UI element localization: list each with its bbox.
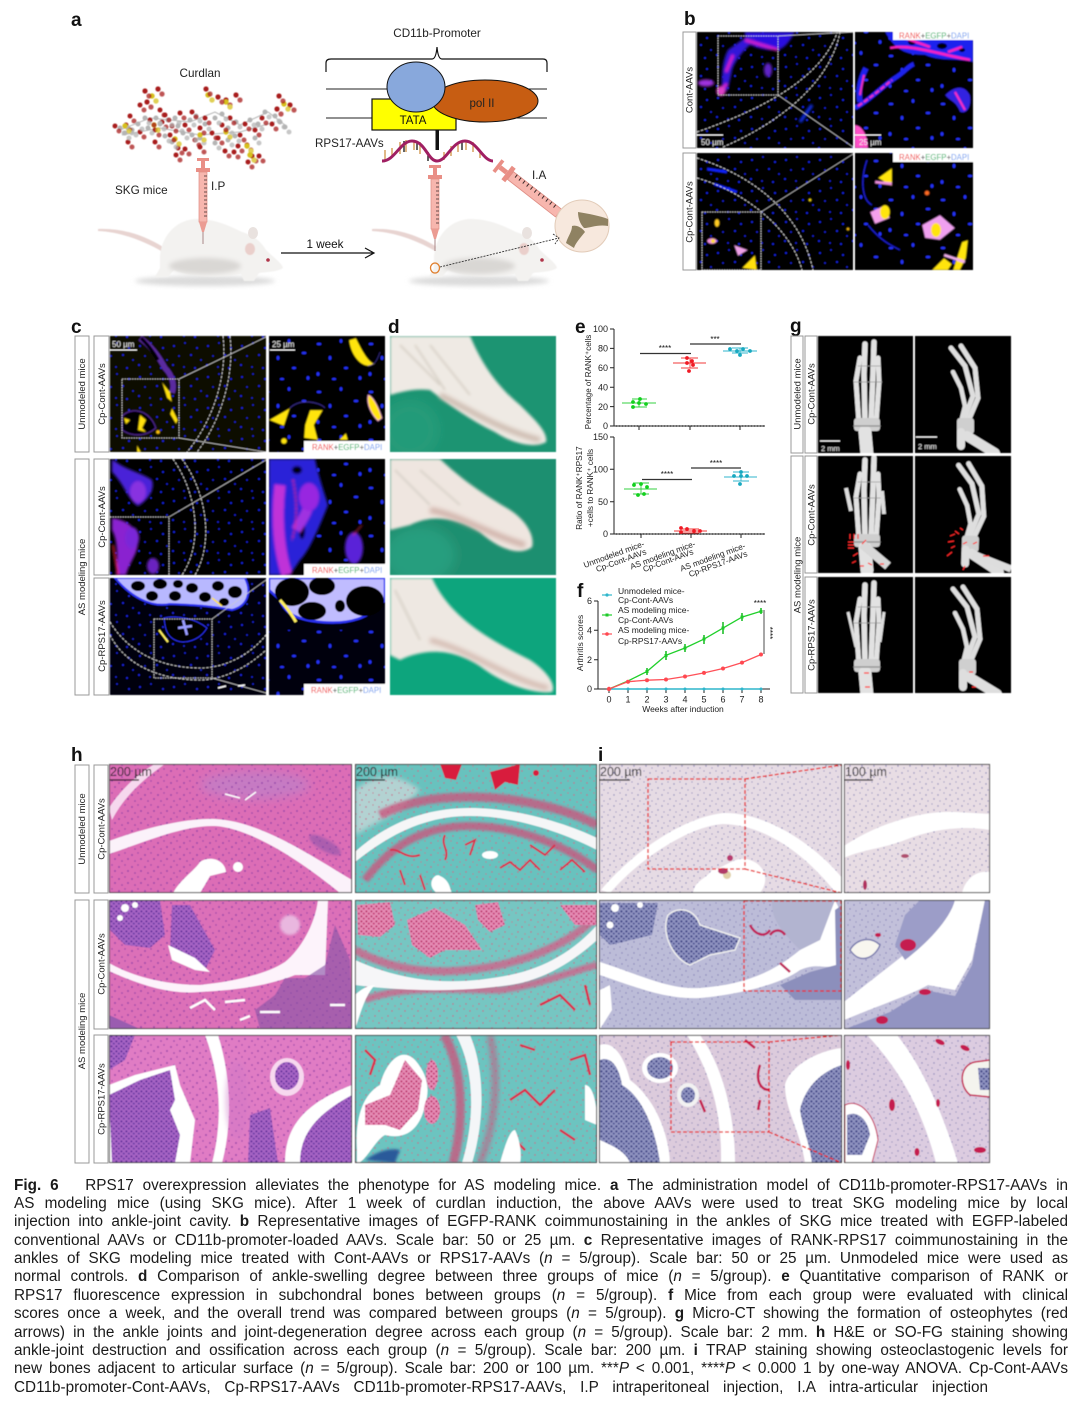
- axes: 0: [587, 684, 592, 694]
- group label unmodeled: [791, 336, 804, 453]
- axes: 2: [587, 655, 592, 665]
- mouse 2: [372, 219, 557, 286]
- row labels: Cp-Cont-AAVs: [806, 363, 818, 425]
- TRAP unmodeled zoom: [844, 764, 990, 893]
- panel label a: a: [71, 10, 82, 31]
- chart percentage of RANK+ cells: 100: [593, 324, 608, 334]
- mouse 1: [98, 219, 283, 286]
- CT row 3 front: [818, 577, 913, 695]
- panel g: micro-CT: [790, 316, 1011, 695]
- row labels: Cp-Cont-AAVs: [96, 798, 108, 860]
- arrow 1 week: 1 week: [306, 238, 344, 251]
- panel label e: e: [575, 317, 586, 338]
- axes: 7: [739, 694, 745, 704]
- panel d: ankle photos: [380, 317, 556, 695]
- panel e: scatter plots: [575, 317, 765, 579]
- SO-FG AS Cp-Cont: [355, 900, 597, 1029]
- row labels: Cp-RPS17-AAVs: [97, 600, 108, 672]
- panel label d: d: [388, 317, 400, 338]
- promoter bracket and complex: pol II: [470, 98, 494, 110]
- panel label c: c: [71, 317, 82, 338]
- row labels: Cp-Cont-AAVs: [96, 933, 108, 995]
- image b2 zoom: [855, 153, 973, 270]
- figure caption: injection into ankle-joint cavity. b Representative images of EGFP-RANK coimmunostaining in the ankles of SKG mice treated with EGFP-labeled: [14, 1213, 1068, 1230]
- photo AS Cp-Cont: [385, 459, 556, 583]
- chart ratio of RANK+RPS17+ cells: +cells to RANK⁺ cells: [586, 449, 595, 527]
- chart percentage of RANK+ cells: ***: [710, 335, 720, 344]
- chart percentage of RANK+ cells: 0: [603, 421, 608, 431]
- row labels: Cp-RPS17-AAVs: [96, 1063, 108, 1135]
- significance markers: [754, 599, 774, 654]
- H&E unmodeled: [109, 764, 352, 893]
- figure caption: normal controls. d Comparison of ankle-swelling degree between three groups of mice (n = 5/group). e Quantitative comparison of RANK or: [14, 1268, 1068, 1285]
- image c1 zoom: 25 µm: [272, 340, 295, 349]
- axes: 6: [720, 694, 726, 704]
- figure caption: ankles of SKG modeling mice treated with Cont-AAVs or RPS17-AAVs (n = 5/group). Scale bar: 50 or 25 µm. Unmodeled mice were used as: [14, 1250, 1068, 1267]
- panel label h: h: [71, 745, 83, 766]
- TRAP AS Cp-Cont overview: [599, 900, 842, 1029]
- H&E AS Cp-Cont: [109, 900, 352, 1029]
- syringe diagonal I.A: [492, 158, 585, 236]
- image c2 zoom: RANK+EGFP+DAPI: [312, 566, 382, 575]
- axes: 6: [587, 596, 592, 606]
- significance markers: ****: [765, 627, 774, 639]
- x category labels: Cp-Cont-AAVs: [642, 547, 695, 574]
- curdlan molecule: [112, 86, 297, 170]
- CT row 1 front: [818, 336, 913, 454]
- promoter bracket and complex: TATA: [400, 115, 427, 127]
- legend: Cp-Cont-AAVs: [618, 595, 673, 605]
- group label unmodeled: Unmodeled mice: [792, 358, 804, 430]
- row labels: Cp-Cont-AAVs: [806, 484, 818, 546]
- dotted pointer to joint: [430, 234, 559, 273]
- TRAP unmodeled overview: [599, 764, 842, 893]
- axes: 3: [663, 694, 669, 704]
- panel f: arthritis scores line chart: [575, 581, 774, 714]
- x category labels: Cp-Cont-AAVs: [595, 547, 648, 574]
- group label AS modeling: AS modeling mice: [792, 537, 804, 613]
- figure caption: scores once a week, and the overall trend was compared between groups (n = 5/group). g Micro-CT showing the formation of osteophytes (red: [14, 1305, 1068, 1322]
- row label Cont-AAVs: Cont-AAVs: [684, 67, 696, 113]
- series teal unmodeled: [609, 688, 762, 690]
- figure caption: RPS17 fluorescence expression in subchondral bones between groups (n = 5/group). f Mice from each group were evaluated with clinical: [14, 1287, 1068, 1304]
- RPS17-AAVs label: RPS17-AAVs: [315, 137, 384, 150]
- CT row 1 side: 2 mm: [918, 442, 937, 451]
- legend: AS modeling mice-: [618, 625, 690, 635]
- legend: Unmodeled mice-: [618, 586, 685, 596]
- image b2 zoom: RANK+EGFP+DAPI: [899, 153, 969, 162]
- x category labels: AS modeling mice-: [629, 539, 697, 571]
- TRAP AS Cp-RPS17 zoom: [844, 1035, 990, 1163]
- SO-FG unmodeled: 200 µm: [356, 765, 398, 779]
- CT row 1 front: 2 mm: [821, 444, 840, 453]
- row labels: Cp-Cont-AAVs: [97, 486, 108, 548]
- DNA helix: [382, 140, 493, 161]
- joint inset: [555, 200, 609, 252]
- figure caption: Fig. 6 RPS17 overexpression alleviates the phenotype for AS modeling mice. a The administration model of CD11b-promoter-RPS17-AAVs in: [14, 1176, 1068, 1194]
- panel label g: g: [790, 316, 802, 337]
- TRAP AS Cp-Cont zoom: [844, 900, 990, 1029]
- axes: 1: [625, 694, 631, 704]
- image b1 zoom: RANK+EGFP+DAPI: [899, 32, 969, 40]
- image c1 zoom: RANK+EGFP+DAPI: [312, 443, 382, 452]
- group label AS modeling mice: [75, 459, 89, 695]
- image c2 zoom: [269, 459, 385, 575]
- image c1 overview: 50 µm: [112, 340, 135, 349]
- syringe vertical: [428, 165, 442, 251]
- group label unmodeled: [75, 765, 89, 893]
- CT row 3 side: [915, 577, 1011, 694]
- group label Unmodeled mice: [75, 336, 89, 452]
- chart percentage of RANK+ cells: 20: [598, 402, 608, 412]
- x category labels: AS modeling mice-: [679, 541, 747, 573]
- group label AS modeling: [791, 456, 804, 693]
- curdlan label: Curdlan: [180, 67, 220, 80]
- H&E AS Cp-RPS17: [109, 1035, 352, 1163]
- figure caption: conventional AAVs or CD11b-promoter-loaded AAVs. Scale bar: 50 or 25 µm. c Representative images of RANK-RPS17 coimmunostaining in the: [14, 1232, 1068, 1249]
- x category labels: [582, 539, 749, 579]
- H&E unmodeled: 200 µm: [110, 765, 152, 779]
- chart percentage of RANK+ cells: [584, 324, 765, 431]
- CT row 2 side: [915, 456, 1011, 573]
- series green AS Cp-Cont: [609, 608, 762, 689]
- CT row 2 front: [818, 456, 913, 573]
- image b1 overview: [697, 32, 853, 148]
- figure caption: CD11b-promoter-Cont-AAVs, Cp-RPS17-AAVs CD11b-promoter-RPS17-AAVs, I.P intraperitoneal injection, I.A intra-articular injection: [14, 1379, 988, 1396]
- row label Cont-AAVs: [683, 32, 696, 148]
- axes: 8: [758, 694, 764, 704]
- panel c: RANK-RPS17 immunostaining: [71, 317, 385, 695]
- chart ratio of RANK+RPS17+ cells: 50: [598, 497, 608, 507]
- image b1 overview: 50 µm: [701, 138, 724, 147]
- legend: Cp-RPS17-AAVs: [618, 636, 682, 646]
- SKG mice label: SKG mice: [115, 184, 168, 197]
- axes: [575, 596, 770, 714]
- axes: 4: [682, 694, 688, 704]
- TRAP unmodeled overview: 200 µm: [600, 765, 642, 779]
- chart percentage of RANK+ cells: Percentage of RANK⁺cells: [584, 335, 593, 429]
- x category labels: Unmodeled mice-: [582, 539, 646, 570]
- axes: 2: [644, 694, 650, 704]
- chart percentage of RANK+ cells: 80: [598, 344, 608, 354]
- chart percentage of RANK+ cells: ****: [659, 344, 671, 353]
- series red AS Cp-RPS17: [607, 652, 763, 691]
- row label Cp-Cont-AAVs: [683, 153, 696, 270]
- chart percentage of RANK+ cells: 60: [598, 363, 608, 373]
- axes: 5: [701, 694, 707, 704]
- image b2 overview: [697, 153, 853, 270]
- image c1 overview: [110, 336, 266, 452]
- figure caption: [14, 1176, 1068, 1396]
- panel h: H&E and SO-FG staining: [71, 745, 597, 1163]
- axes: 0: [606, 694, 612, 704]
- group label AS modeling mice: AS modeling mice: [77, 539, 88, 615]
- syringe I.P left: [196, 158, 210, 244]
- axes: 4: [587, 626, 592, 636]
- panel label f: f: [577, 581, 584, 602]
- chart ratio of RANK+RPS17+ cells: ****: [710, 459, 722, 468]
- panel label i: i: [598, 745, 603, 766]
- legend: [602, 586, 690, 646]
- row labels: [805, 336, 818, 693]
- panel label b: b: [684, 9, 696, 30]
- SO-FG AS Cp-RPS17: [355, 1035, 597, 1163]
- row labels: Cp-RPS17-AAVs: [806, 599, 818, 671]
- arrow 1 week: [281, 238, 374, 258]
- image c1 zoom: [269, 336, 385, 452]
- CD11b promoter label: CD11b-Promoter: [393, 27, 481, 40]
- group label AS modeling: AS modeling mice: [77, 993, 88, 1069]
- chart ratio of RANK+RPS17+ cells: 150: [593, 432, 608, 442]
- group label unmodeled: Unmodeled mice: [77, 793, 88, 865]
- group label Unmodeled mice: Unmodeled mice: [77, 358, 88, 430]
- figure caption: new bones adjacent to articular surface (n = 5/group). Scale bar: 200 or 100 µm. ***P < 0.001, ****P < 0.000 1 by one-way ANOVA. Cp-Cont-AAVs: [14, 1360, 1068, 1377]
- photo AS Cp-RPS17: [390, 578, 556, 695]
- TRAP AS Cp-RPS17 overview: [599, 1035, 842, 1163]
- row label Cp-Cont-AAVs: Cp-Cont-AAVs: [684, 181, 696, 243]
- x category labels: Cp-RPS17-AAVs: [688, 549, 749, 579]
- chart ratio of RANK+RPS17+ cells: ****: [661, 470, 673, 479]
- chart ratio of RANK+RPS17+ cells: [575, 432, 765, 579]
- image c3 zoom: RANK+EGFP+DAPI: [311, 686, 381, 695]
- panel b: EGFP-RANK immunostaining: [683, 9, 973, 270]
- image b1 zoom: [855, 32, 973, 148]
- image c3 overview: [110, 578, 266, 695]
- axes: Weeks after induction: [642, 704, 724, 714]
- figure caption: ankle-joint destruction and ossification across each group (n = 5/group). Scale bar: 200 µm. i TRAP staining showing osteoclastogenic levels for: [14, 1342, 1068, 1359]
- I.A label: I.A: [532, 169, 546, 182]
- figure caption: arrows) in the ankle joints and joint-degeneration degree across each group (n = 5/group). Scale bar: 2 mm. h H&E or SO-FG staining showing: [14, 1324, 1068, 1341]
- chart ratio of RANK+RPS17+ cells: Ratio of RANK⁺RPS17: [575, 446, 584, 530]
- image c2 overview: [110, 459, 266, 575]
- photo unmodeled: [380, 336, 556, 460]
- row labels: Cp-Cont-AAVs: [97, 363, 108, 425]
- row labels: [94, 765, 108, 1163]
- legend: AS modeling mice-: [618, 605, 690, 615]
- chart ratio of RANK+RPS17+ cells: 100: [593, 464, 608, 474]
- image b1 zoom: 25 µm: [859, 138, 882, 147]
- chart ratio of RANK+RPS17+ cells: 0: [603, 529, 608, 539]
- image c3 zoom: [269, 577, 385, 695]
- figure caption: AS modeling mice (using SKG mice). After 1 week of curdlan induction, the above AAVs were used to treat SKG modeling mice by local: [14, 1195, 1068, 1212]
- row labels: [94, 336, 109, 695]
- axes: Arthritis scores: [575, 615, 585, 671]
- promoter bracket and complex: [326, 47, 547, 150]
- significance markers: ****: [754, 599, 766, 608]
- group label AS modeling: [75, 900, 89, 1163]
- legend: Cp-Cont-AAVs: [618, 615, 673, 625]
- SO-FG unmodeled: [355, 764, 597, 893]
- TRAP unmodeled zoom: 100 µm: [845, 765, 887, 779]
- CT row 1 side: [915, 336, 1011, 453]
- panel a: administration model: [71, 10, 609, 286]
- chart percentage of RANK+ cells: 40: [598, 382, 608, 392]
- panel i: TRAP staining: [598, 745, 990, 1163]
- I.P label: I.P: [211, 180, 225, 193]
